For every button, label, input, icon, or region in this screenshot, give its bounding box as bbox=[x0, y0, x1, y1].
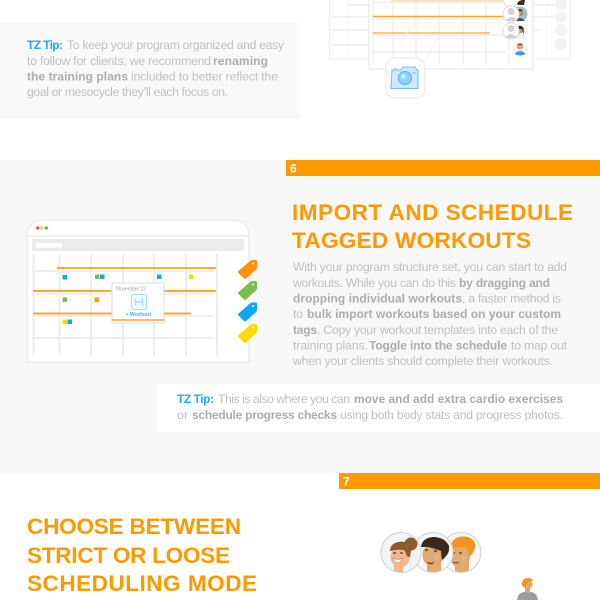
text block: section 6 body: , a faster method is bbox=[462, 292, 561, 306]
heading: choose between strict or loose scheduling mode: SCHEDULING MODE bbox=[27, 571, 257, 596]
text block: section 6 body: workouts. While you can do this bbox=[292, 276, 456, 290]
text block: section 6 body: With your program structure set, you can start to add bbox=[293, 260, 567, 274]
schedule lines bbox=[33, 268, 216, 314]
text block: section 6 body: . Copy your workout templates into each of the bbox=[317, 323, 558, 337]
step bar 7: 7 bbox=[343, 474, 350, 488]
heading: import and schedule tagged workouts: TAGGED WORKOUTS bbox=[292, 228, 531, 253]
avatar: dark-haired client bbox=[413, 532, 453, 574]
icon: camera bbox=[386, 58, 425, 98]
panel: tip about renaming training plans: goal or mesocycle they’ll each focus on. bbox=[27, 85, 228, 99]
avatar: smiling woman bbox=[381, 532, 421, 574]
text block: section 6 body: bulk import workouts based on your custom bbox=[307, 307, 561, 321]
panel: tip about cardio and progress checks: This is also where you can bbox=[218, 392, 350, 406]
panel: tip about cardio and progress checks: schedule progress checks bbox=[192, 408, 337, 422]
illustration: training plan calendars with camera bbox=[330, 0, 570, 98]
text block: section 6 body: to map out bbox=[511, 338, 568, 352]
workout popup: November 22 bbox=[116, 286, 146, 292]
panel: tip about cardio and progress checks: using both body stats and progress photos. bbox=[340, 408, 563, 422]
step bar 6 bbox=[286, 160, 600, 176]
workout tag markers bbox=[62, 274, 194, 324]
text block: section 6 body: training plans. bbox=[293, 338, 368, 352]
icons: colored tags bbox=[238, 260, 257, 343]
workout popup: + Workout bbox=[126, 312, 151, 318]
heading: import and schedule tagged workouts bbox=[292, 200, 573, 253]
text block: section 6 body: Toggle into the schedule bbox=[369, 338, 507, 352]
step bar 7 bbox=[339, 473, 600, 489]
panel: tip about cardio and progress checks: move and add extra cardio exercises bbox=[354, 392, 563, 406]
text block: section 6 body: tags bbox=[293, 323, 317, 337]
calendar grid bbox=[32, 254, 217, 356]
text block: section 6 body: dropping individual workouts bbox=[293, 292, 462, 306]
panel: tip about renaming training plans: the training plans bbox=[27, 70, 128, 84]
panel: tip about cardio and progress checks: TZ Tip: bbox=[177, 392, 214, 406]
panel: tip about renaming training plans: included to better reflect the bbox=[131, 70, 278, 84]
panel: tip about renaming training plans: renaming bbox=[213, 54, 268, 68]
illustration: three client avatars bbox=[381, 532, 481, 574]
workout popup bbox=[112, 283, 164, 323]
panel: tip about renaming training plans bbox=[0, 23, 300, 119]
heading: import and schedule tagged workouts: IMPORT AND SCHEDULE bbox=[292, 200, 573, 225]
heading: choose between strict or loose scheduling mode: CHOOSE BETWEEN bbox=[27, 514, 241, 539]
client avatars bbox=[503, 0, 528, 56]
panel: tip about renaming training plans: To keep your program organized and easy bbox=[67, 38, 285, 52]
back calendar bbox=[330, 0, 570, 59]
panel: tip about cardio and progress checks bbox=[157, 384, 600, 432]
heading: choose between strict or loose scheduling mode bbox=[27, 514, 257, 596]
text block: section 6 body: to bbox=[293, 307, 303, 321]
panel: tip about renaming training plans: to follow for clients, we recommend bbox=[27, 54, 211, 68]
text block: section 6 body: by dragging and bbox=[459, 276, 550, 290]
avatar: orange-haired client bbox=[447, 532, 482, 574]
text block: section 6 body: when your clients should complete their workouts. bbox=[292, 354, 553, 368]
step bar 6: 6 bbox=[290, 162, 297, 176]
heading: choose between strict or loose scheduling mode: STRICT OR LOOSE bbox=[27, 543, 230, 568]
illustration: small standing person bbox=[517, 578, 538, 600]
front calendar bbox=[369, 0, 533, 69]
illustration: calendar with workout tags bbox=[27, 220, 257, 362]
text block: section 6 body bbox=[292, 260, 568, 368]
browser window bbox=[27, 220, 249, 362]
panel: section 6 background bbox=[0, 160, 600, 473]
panel: tip about renaming training plans: TZ Tip: bbox=[27, 38, 63, 52]
panel: tip about cardio and progress checks: or bbox=[177, 408, 188, 422]
